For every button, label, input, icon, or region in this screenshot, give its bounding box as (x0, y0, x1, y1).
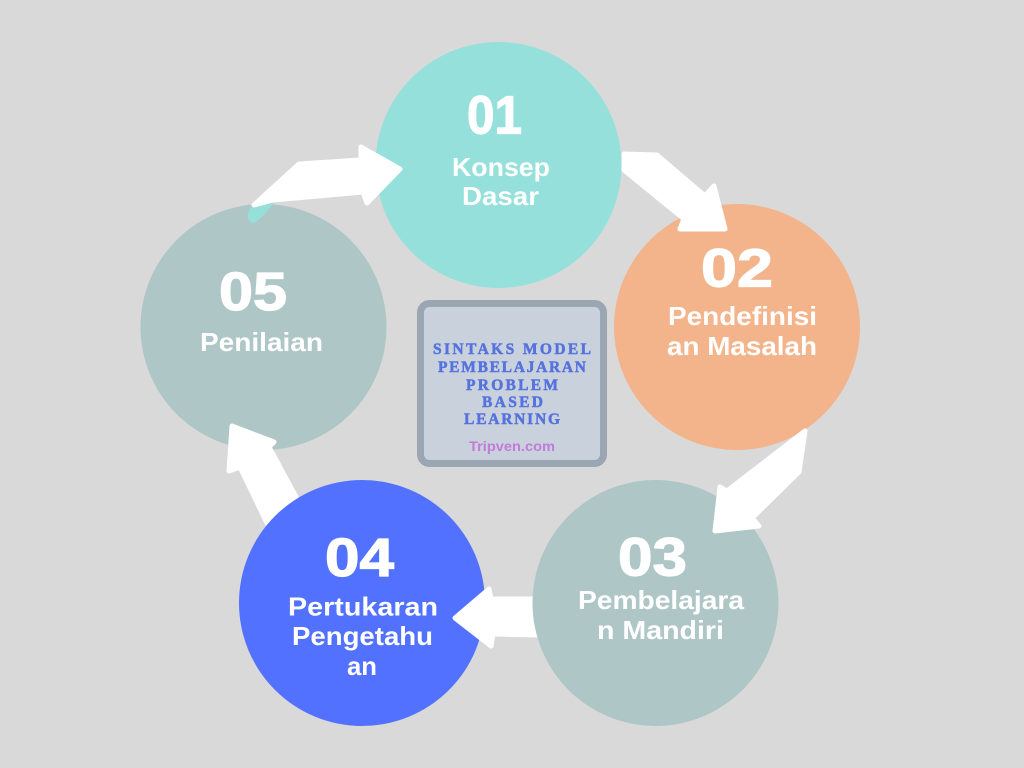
step 04 text (288, 528, 438, 681)
source: Tripven.com: Tripven.com (469, 438, 555, 454)
circle: step 04 (239, 480, 485, 726)
step 02 text (667, 238, 817, 361)
step 03 text (578, 528, 745, 645)
label: Penilaian: Penilaian (200, 327, 323, 357)
label: Konsep Dasar: Konsep (452, 152, 550, 182)
arrow: step 03 to step 04 (455, 589, 540, 646)
circle: step 01 (376, 42, 622, 288)
label: Pendefinisian Masalah: an Masalah (667, 331, 817, 361)
heading: BASED (482, 394, 543, 411)
number 02: 02 (701, 238, 773, 298)
number 03: 03 (618, 528, 687, 588)
box (420, 304, 604, 464)
heading: PEMBELAJARAN (438, 359, 586, 376)
label: Pertukaran Pengetahuan: an (347, 651, 377, 681)
label: Pembelajaran Mandiri: Pembelajara (578, 585, 745, 615)
label: Pertukaran Pengetahuan (288, 592, 438, 681)
panel: central title box (420, 304, 604, 464)
number 01: 01 (467, 86, 522, 146)
circle: step 02 (614, 204, 860, 450)
heading: PROBLEM (466, 377, 558, 394)
heading: LEARNING (464, 411, 560, 428)
arrow: step 01 to step 02 (624, 154, 725, 229)
circle: step 03 (532, 480, 778, 726)
step 01 text (452, 86, 550, 211)
label: Pertukaran Pengetahuan: Pengetahu (292, 621, 433, 651)
label: Pendefinisian Masalah (667, 301, 817, 361)
label: Konsep Dasar: Dasar (462, 181, 539, 211)
arrow: step 02 to step 03 (715, 431, 805, 531)
label: Pembelajaran Mandiri: n Mandiri (597, 615, 724, 645)
step 05 text (200, 262, 323, 357)
circle: step 05 (140, 204, 386, 450)
label: Pertukaran Pengetahuan: Pertukaran (288, 592, 438, 622)
label: Konsep Dasar (452, 152, 550, 211)
label: Pendefinisian Masalah: Pendefinisi (668, 301, 817, 331)
heading: SINTAKS MODEL (433, 341, 591, 358)
arrow: step 05 to step 01 (248, 147, 400, 223)
number 04: 04 (325, 528, 394, 588)
number 05: 05 (219, 262, 287, 322)
heading (433, 341, 591, 428)
arrow: step 05 from step 04 (229, 426, 296, 523)
label: Pembelajaran Mandiri (578, 585, 745, 645)
